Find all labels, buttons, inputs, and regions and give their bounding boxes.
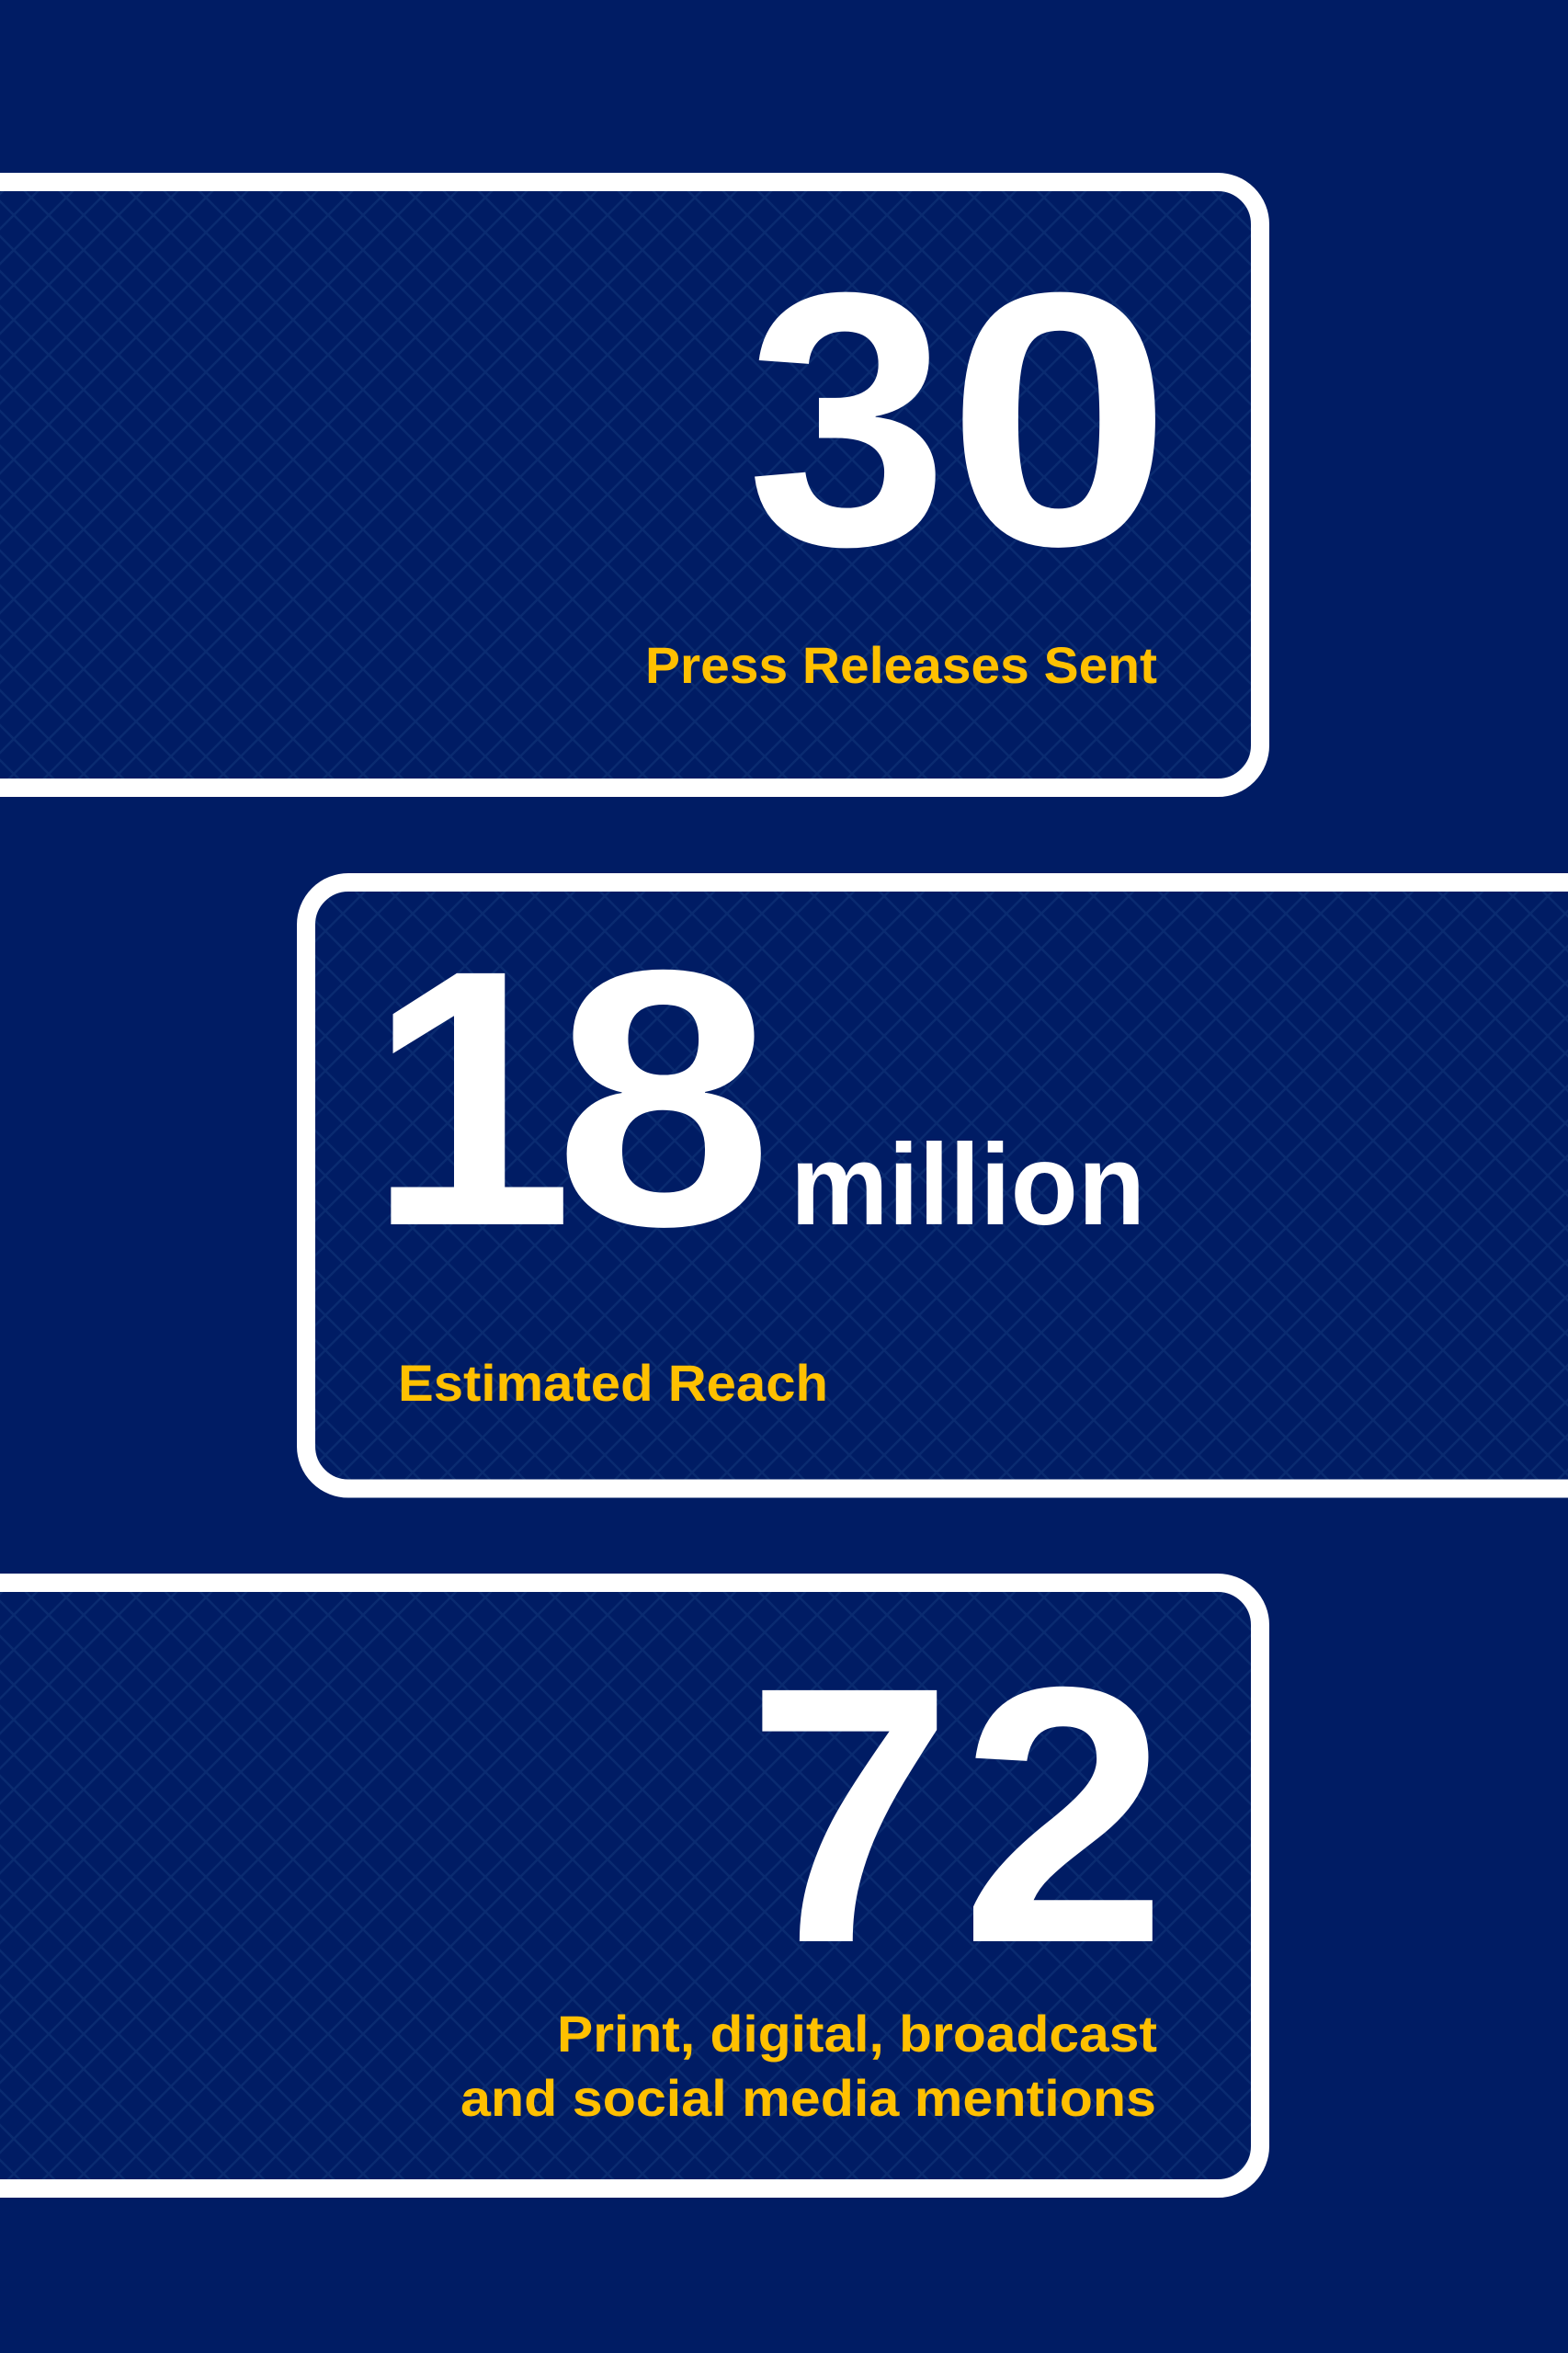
stat number: 18 [368, 895, 773, 1302]
panel frame: press releases [0, 182, 1260, 788]
stat number: 72 [746, 1612, 1167, 2019]
stat number: 30: 3 [746, 218, 949, 621]
stat number: 18: 1 [368, 895, 574, 1302]
label: estimated reach: Estimated Reach [398, 1354, 828, 1412]
panel: media mentions [0, 1583, 1260, 2188]
label: print, digital, broadcast: Print, digital, broadcast [557, 2005, 1157, 2063]
panel: estimated reach [306, 882, 1568, 1489]
unit: million: million [790, 1121, 1145, 1249]
panel: press releases [0, 182, 1260, 788]
stat number: 30 [746, 218, 1172, 621]
stat number: 72: 2 [960, 1612, 1167, 2019]
stat number: 72: 7 [746, 1612, 953, 2019]
label: press releases sent: Press Releases Sent [645, 636, 1157, 694]
panel frame: media mentions [0, 1583, 1260, 2188]
panel frame: estimated reach [306, 882, 1568, 1489]
label: and social media mentions: and social media mentions [460, 2069, 1156, 2127]
stat number: 18: 8 [554, 895, 773, 1302]
stat number: 30: 0 [947, 218, 1172, 621]
